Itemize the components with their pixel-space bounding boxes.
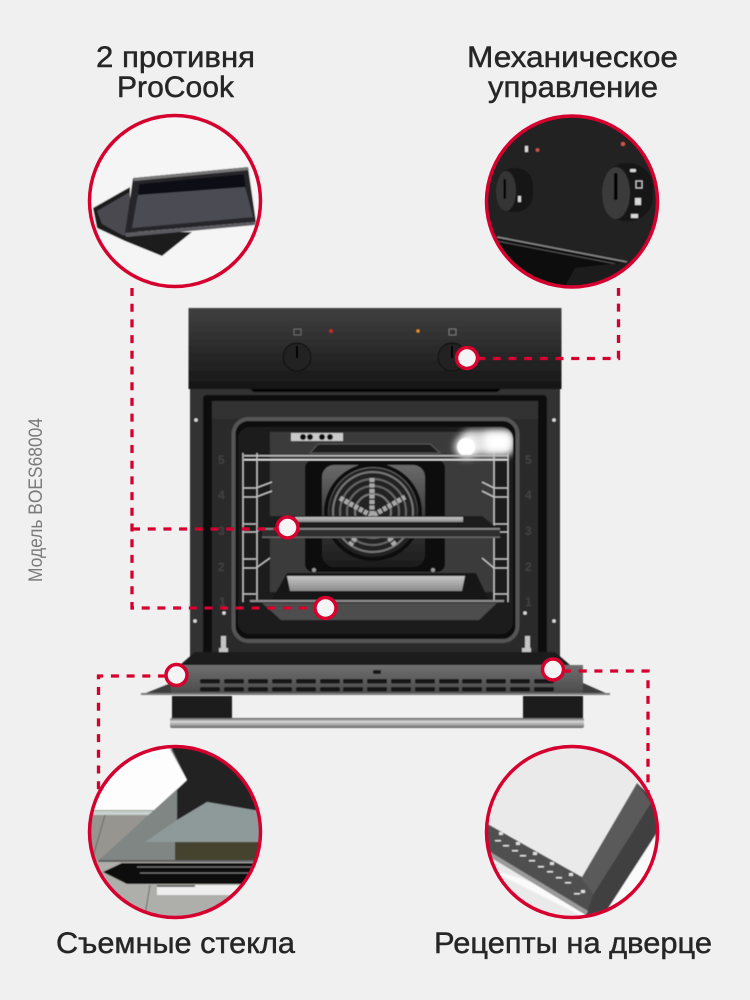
large knob: [616, 164, 652, 220]
left knob: [283, 329, 311, 371]
inner panel: [212, 401, 538, 665]
rack level numbers: 3: [525, 524, 532, 538]
marker: door recipes: [542, 659, 564, 680]
recipe icons: [495, 832, 585, 894]
top bracket: [291, 433, 343, 441]
oven photo: [141, 308, 610, 728]
small knob: [496, 168, 533, 212]
cavity frame: [234, 419, 518, 641]
heading: 2 trays: 2 противня: [96, 41, 255, 74]
upper tray: [125, 167, 256, 233]
rack level numbers: 1: [525, 595, 532, 609]
right knob: [438, 329, 466, 371]
heading: mechanical control: [467, 41, 678, 104]
handle brackets: [172, 696, 583, 719]
top wire rack: [244, 455, 508, 456]
left side racks: [243, 453, 508, 602]
marker: upper tray: [277, 517, 298, 538]
door handle: [170, 718, 584, 728]
door edge: [585, 783, 660, 916]
door seal: [203, 395, 547, 665]
connector lines: [98, 288, 648, 795]
glass edge: [497, 238, 622, 285]
indicator lights: [329, 329, 420, 333]
marker: lower tray: [315, 598, 336, 618]
lower tray: [93, 187, 192, 256]
callout circle: mechanical knobs: [484, 114, 660, 289]
oven body: [190, 389, 560, 666]
upper tray: [258, 516, 500, 538]
oven lamp: [462, 430, 514, 455]
model label: Модель BOES68004: [26, 418, 47, 582]
rack level numbers: 5: [525, 453, 532, 467]
fan: [326, 465, 420, 559]
fan cover: [322, 465, 425, 567]
knob icons: [518, 169, 642, 218]
panel lights: [525, 146, 528, 152]
black glass: [103, 863, 265, 884]
rack level numbers: 1: [219, 595, 226, 609]
marker: door glass: [166, 664, 187, 686]
door hinges: [219, 636, 531, 662]
callout circle: door recipes: [484, 744, 660, 920]
heading: removable glass: Съемные стекла: [56, 927, 295, 960]
heading: mechanical control: управление: [488, 71, 658, 104]
door handle: [157, 885, 239, 895]
rack level numbers: 5: [218, 453, 225, 467]
cavity interior: [238, 427, 514, 634]
rack level numbers: 3: [218, 524, 225, 538]
callout circle: baking trays: [85, 110, 265, 290]
door vents: [200, 670, 554, 692]
heading: 2 trays: ProCook: [117, 71, 235, 104]
rack level numbers: 4: [218, 488, 225, 502]
screws: [193, 418, 556, 623]
lower tray: [250, 573, 504, 620]
heading: recipes on door: Рецепты на дверце: [434, 927, 712, 960]
rack level numbers: 2: [525, 560, 532, 574]
back screws: [312, 568, 435, 572]
heading: 2 trays: [96, 41, 255, 104]
marker: right knob: [456, 348, 478, 368]
lower white area: [498, 835, 656, 915]
rack level numbers: 2: [218, 560, 225, 574]
control panel: [188, 308, 562, 389]
glass pane: [98, 749, 265, 861]
recipe strip: [482, 822, 593, 915]
rack level numbers: 4: [525, 488, 532, 502]
open door: [141, 652, 610, 695]
heading: mechanical control: Механическое: [467, 41, 678, 74]
rack level numbers: [218, 453, 532, 609]
callout circle: removable glass: [85, 740, 265, 920]
